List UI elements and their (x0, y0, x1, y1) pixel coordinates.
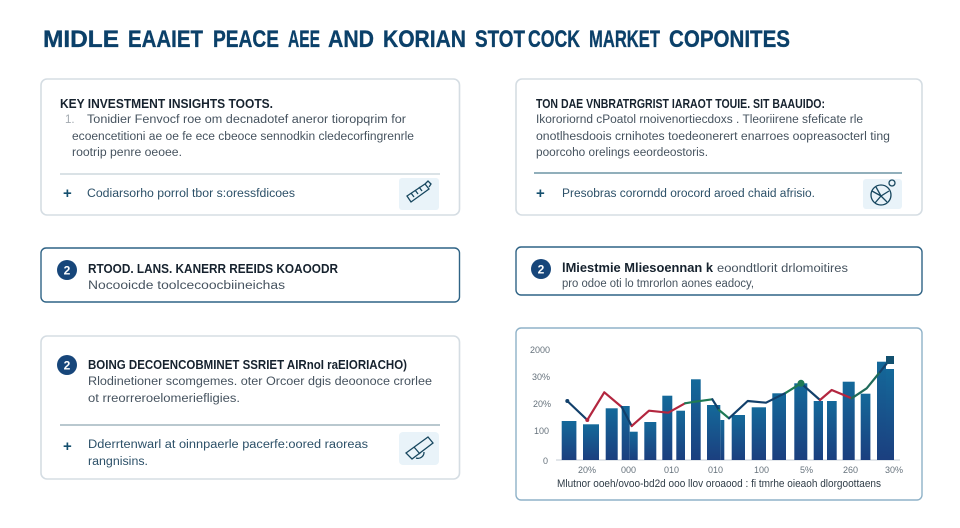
title: KORIAN (383, 26, 466, 53)
title: COPONITES (669, 26, 790, 53)
heading: left callout: RTOOD. LANS. KANERR REEIDS KOAOODR (88, 262, 338, 276)
icon: number badge (531, 259, 551, 279)
icon: number badge: 2 (64, 264, 71, 278)
text block: lower left note (88, 439, 368, 468)
icon: plus: + (536, 185, 545, 202)
icon: number badge (57, 355, 77, 375)
text block: left callout body: Nocooicde toolcecoocbiineichas (88, 280, 285, 292)
chart: x axis labels: 20% (578, 465, 596, 475)
chart: x axis labels: 30% (885, 465, 903, 475)
text block: insights body (65, 114, 414, 159)
chart: x axis labels: 260 (843, 465, 858, 475)
chart: y axis labels: 2000 (530, 345, 550, 355)
heading: right callout: lMiestmie Mliesoennan k (562, 261, 713, 275)
text block: insights body: Tonidier Fenvocf roe om decnadotef aneror tioropqrim for (87, 114, 406, 126)
title: EAAIET (128, 26, 203, 53)
chart: x axis labels: 010 (664, 465, 679, 475)
title (43, 26, 790, 53)
chart: x axis labels: 5% (800, 465, 813, 475)
chart: bars (562, 362, 894, 460)
chart: trend line (565, 356, 894, 426)
title: PEACE (213, 26, 279, 53)
heading: right callout: eoondtlorit drlomoitires (717, 263, 848, 275)
text block: top right body: Ikororiornd cPoatol rnoivenortiecdoxs . Tleoriirene sfeficate rle (536, 114, 863, 126)
chart: y axis labels (530, 345, 551, 466)
chart: y axis labels: 20% (533, 399, 551, 409)
chart: x axis labels: 000 (621, 465, 636, 475)
chart: x axis labels: 100 (754, 465, 769, 475)
icon: number badge: 2 (538, 262, 545, 276)
icon: tool (399, 432, 439, 465)
chart: y axis labels: 100 (534, 426, 549, 436)
heading: right callout (562, 261, 848, 275)
heading: lower left insights: BOING DECOENCOBMINET SSRIET AIRnoI raEIORIACHO) (88, 358, 407, 372)
text block: lower left note: rangnisins. (88, 456, 148, 468)
icon: number badge: 2 (64, 358, 71, 372)
chart: y axis labels: 0 (543, 456, 548, 466)
heading: key investment insights: KEY INVESTMENT INSIGHTS TOOTS. (60, 97, 273, 111)
text block: lower left body: ot rreorreroelomeriefligies. (88, 393, 240, 405)
title: AEE (288, 26, 320, 53)
text block: lower left body (88, 376, 432, 405)
heading: top right insights: TON DAE VNBRATRGRIST IARAOT TOUIE. SIT BAAUIDO: (536, 97, 825, 111)
icon: number badge (57, 260, 77, 280)
panel: right callout (516, 247, 922, 295)
icon: plus: + (63, 438, 72, 455)
icon: tool (399, 178, 439, 210)
title: STOT (475, 26, 525, 53)
chart: y axis labels: 30% (532, 372, 550, 382)
chart: caption: Mlutnor ooeh/ovoo-bd2d ooo llov oroaood : fi tmrhe oieaoh dlorgoottaens (557, 478, 881, 490)
text block: top right body (536, 114, 890, 159)
chart: x axis labels: 010 (708, 465, 723, 475)
text block: insights body: ecoencetitioni ae oe fe ece cbeoce sennodkin cledecorfingrenrle (72, 131, 414, 143)
title: MIDLE (43, 26, 119, 53)
text block: lower left body: Rlodinetioner scomgemes. oter Orcoer dgis deoonoce crorlee (88, 376, 432, 388)
title: AND (328, 26, 374, 53)
text block: lower left note: Dderrtenwarl at oinnpaerle pacerfe:oored raoreas (88, 439, 368, 451)
title: COCK (528, 26, 580, 53)
text block: insights note: Codiarsorho porrol tbor s:oressfdicoes (87, 188, 295, 200)
text block: top right note: Presobras cororndd orocord aroed chaid afrisio. (562, 188, 815, 200)
text block: insights body: rootrip penre oeoee. (72, 147, 182, 159)
panel: lower left insights (41, 336, 460, 479)
icon: globe (863, 179, 902, 209)
panel: top right insights (516, 79, 922, 215)
panel: key investment insights (41, 79, 460, 215)
text block: right callout body: pro odoe oti lo tmrorlon aones eadocy, (562, 278, 754, 290)
text block: insights body: 1. (65, 114, 75, 126)
panel: chart (516, 328, 922, 500)
text block: top right body: onotlhesdoois crnihotes toedeonerert enarroes oopreasocterl ting (536, 131, 890, 143)
title: MARKET (589, 26, 660, 53)
text block: top right body: poorcoho orelings eeordeostoris. (536, 147, 708, 159)
panel: left callout (41, 248, 460, 302)
icon: plus: + (63, 185, 72, 202)
chart: x axis labels (578, 465, 903, 475)
